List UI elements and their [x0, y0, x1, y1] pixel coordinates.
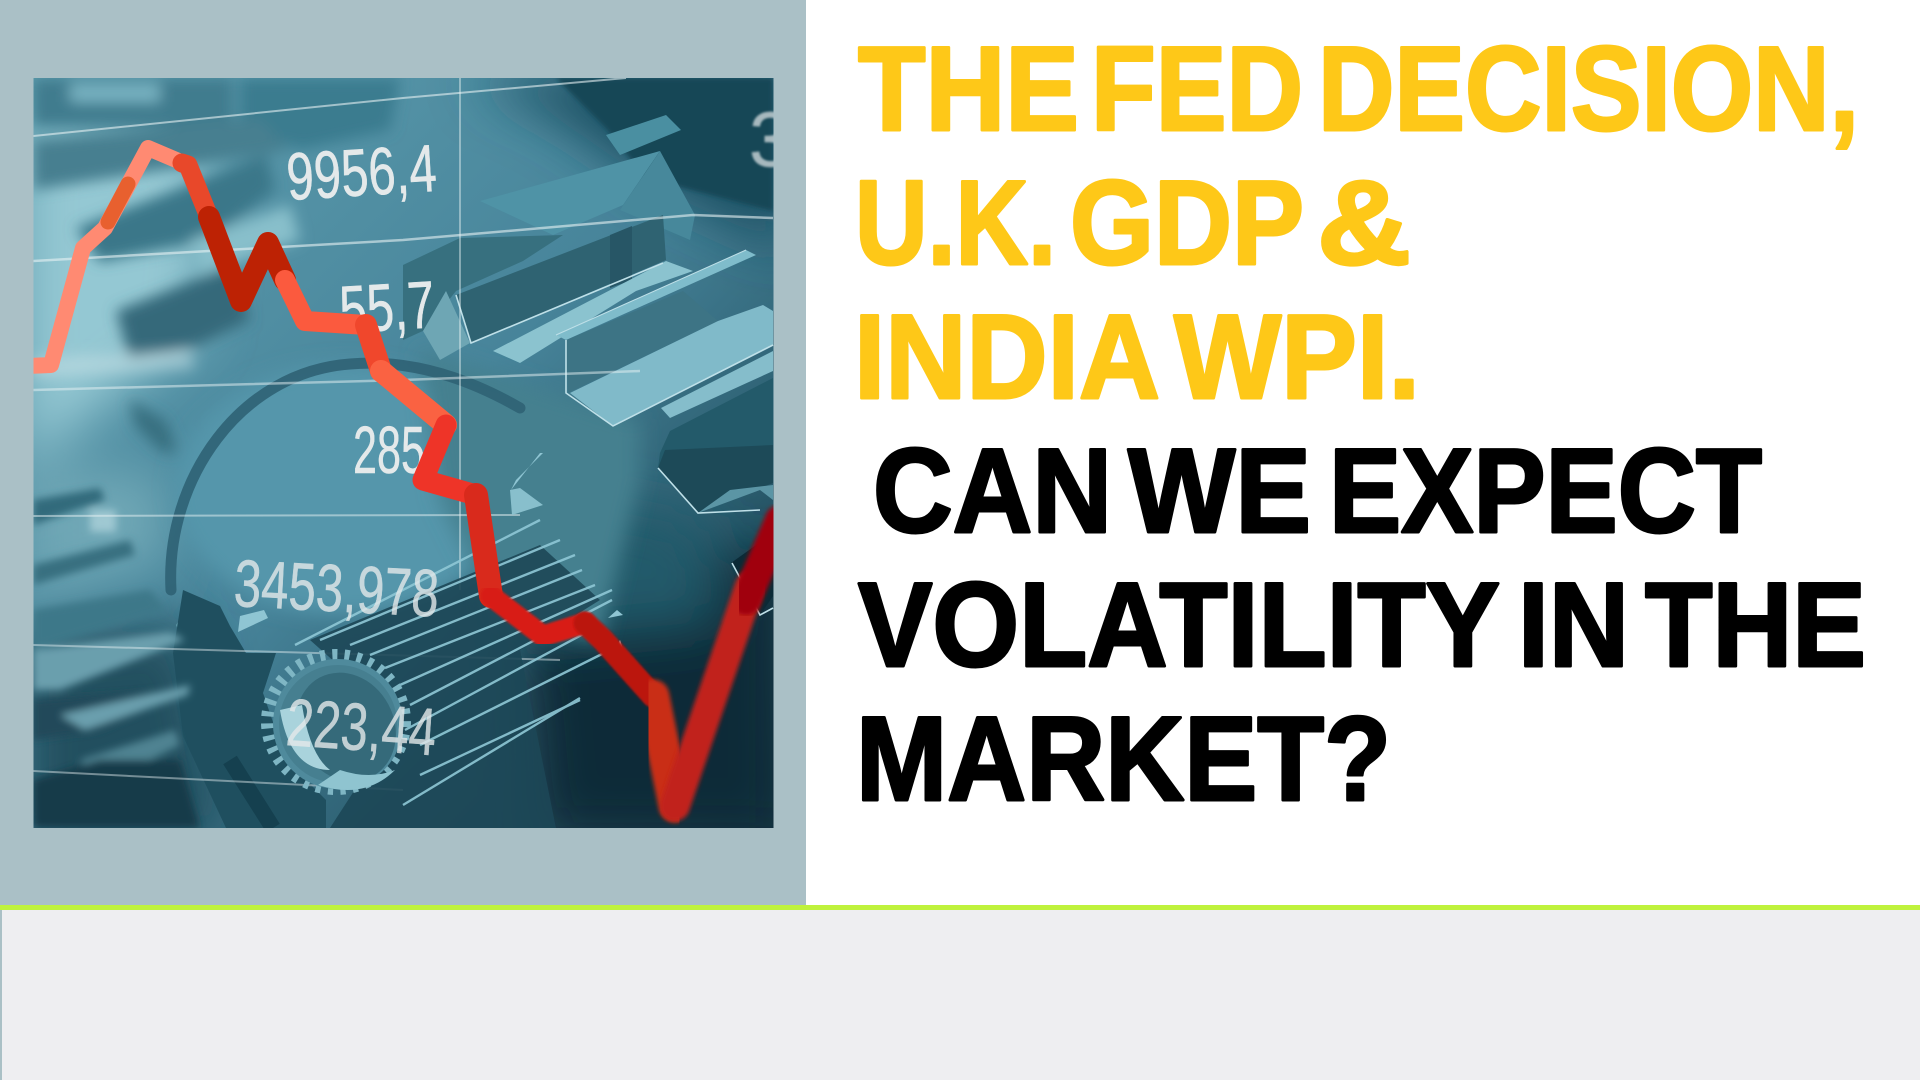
- left edge sliver: [0, 910, 2, 1080]
- panel: photo backdrop: [0, 0, 806, 905]
- heading: yellow headline: [854, 22, 1859, 424]
- chart numbers: 223,44: [284, 685, 439, 770]
- small gear and shaft lines: [238, 453, 625, 828]
- chart numbers: 9956,4: [284, 131, 439, 215]
- heading: black question: MARKET?: [856, 692, 1391, 826]
- chart numbers: 3453,978: [232, 546, 441, 632]
- photo: falling market chart over gears: [20, 60, 792, 840]
- red falling trend line: [26, 148, 780, 806]
- heading: yellow headline: DECISION,: [1318, 22, 1859, 156]
- heading: yellow headline: GDP: [1070, 156, 1304, 290]
- heading: yellow headline: U.K.: [855, 156, 1056, 290]
- heading: black question: IN: [1518, 558, 1629, 692]
- left blurred gear teeth: [33, 488, 200, 828]
- heading: yellow headline: WPI.: [1174, 290, 1420, 424]
- heading: black question: EXPECT: [1329, 424, 1762, 558]
- dark gear section under disc: [173, 590, 326, 828]
- page background: lower band: [0, 905, 1920, 1080]
- heading: yellow headline: &: [1317, 156, 1411, 290]
- grid lines: [33, 78, 773, 790]
- chart numbers: 285: [353, 413, 425, 488]
- heading: black question: [856, 424, 1866, 826]
- heading: yellow headline: FED: [1091, 22, 1303, 156]
- chart numbers: [232, 95, 792, 770]
- chart numbers: 3: [749, 95, 792, 183]
- heading: yellow headline: INDIA: [854, 290, 1160, 424]
- large gear disc: [165, 358, 645, 648]
- chart numbers: 55,7: [337, 267, 437, 348]
- top-left blurred gear bands: [33, 78, 400, 455]
- heading: yellow headline: THE: [858, 22, 1079, 156]
- soft colour zones: [20, 60, 790, 840]
- heading: black question: WE: [1128, 424, 1311, 558]
- upper-right gear bars: [403, 78, 773, 615]
- heading: black question: THE: [1645, 558, 1866, 692]
- lime divider line: [0, 905, 1920, 910]
- heading: black question: CAN: [873, 424, 1112, 558]
- heading: black question: VOLATILITY: [858, 558, 1500, 692]
